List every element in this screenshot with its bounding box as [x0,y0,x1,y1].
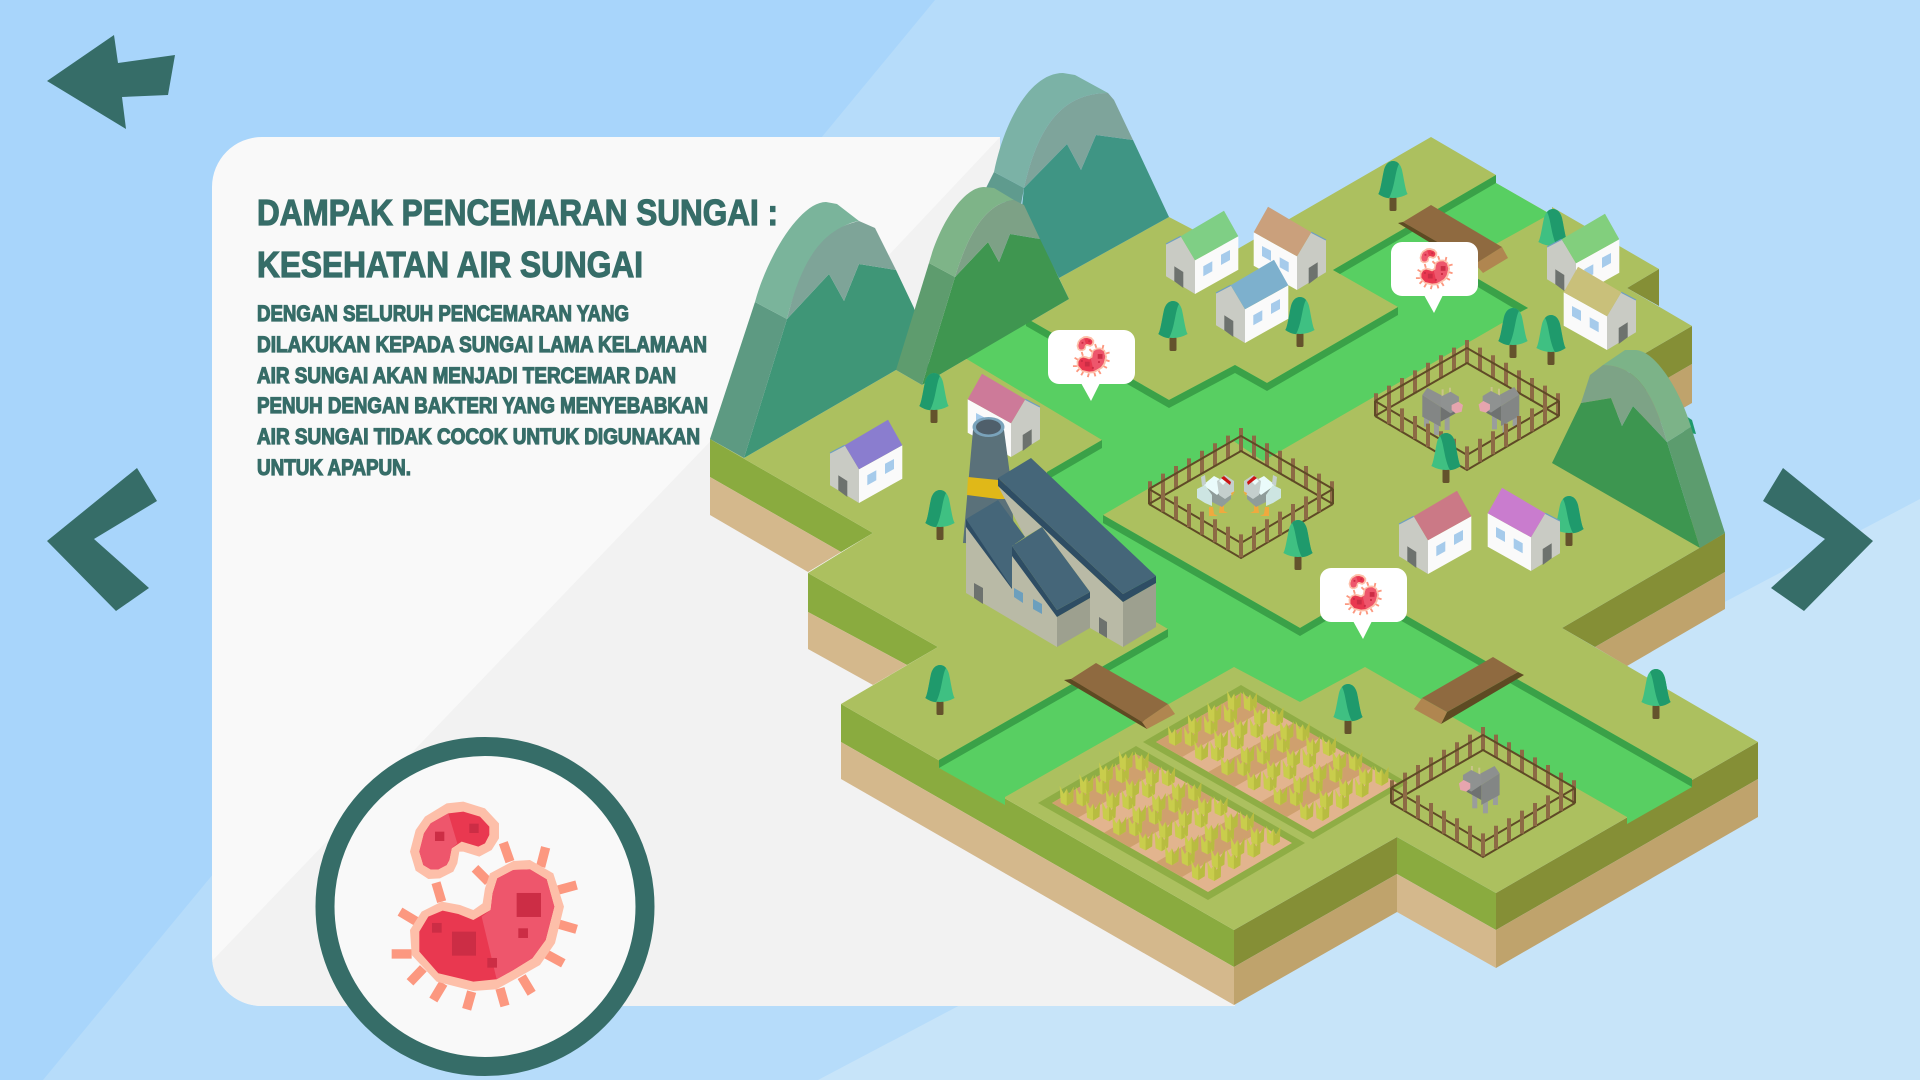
factory [966,458,1156,647]
fence: chicken pen front [1149,489,1333,558]
text block: description: DENGAN SELURUH PENCEMARAN YANG [257,301,629,326]
fence: single cow pen front [1391,788,1575,857]
arrow: back [47,35,175,129]
callout: bacteria bottom [1320,568,1407,639]
arrow: next [1763,468,1873,611]
heading: DAMPAK PENCEMARAN SUNGAI : [257,192,778,233]
chicken: left [1197,475,1235,516]
factory chimney [963,417,1015,545]
bridge: lower left [1064,663,1175,729]
mountain: centre green [896,187,1069,385]
text block: description: DILAKUKAN KEPADA SUNGAI LAMA KELAMAAN [257,332,707,357]
cow: right [1479,387,1519,434]
isometric land: top surface [710,137,1758,930]
fence: cow pen front [1375,401,1559,470]
heading: KESEHATAN AIR SUNGAI [257,244,643,285]
callout: bacteria top [1391,242,1478,313]
cow: left [1422,388,1463,435]
cow: single [1459,766,1500,813]
mountain: left [710,202,930,458]
trees and houses: upper [1158,161,1636,365]
bridge: top [1398,205,1508,273]
arrow: previous [47,468,157,611]
text block: description [257,301,708,480]
isometric land: soil and grass sides [710,269,1758,1005]
mountain: right [1552,350,1725,548]
fence: single cow pen back [1391,727,1575,803]
bridge: lower right [1414,657,1524,724]
tree: hidden behind right mountain [1684,416,1696,434]
text block: description: AIR SUNGAI TIDAK COCOK UNTUK DIGUNAKAN [257,424,700,449]
text block: description: UNTUK APAPUN. [257,455,411,480]
heading [257,192,778,285]
icon: bacteria in circle [325,746,645,1066]
fence: chicken pen back [1149,428,1333,504]
fence: cow pen back [1375,340,1559,416]
chicken: right [1243,475,1281,516]
trees and houses: middle and lower [830,373,1671,734]
rice field: lower [1038,746,1305,900]
panel: text card [212,137,1242,1007]
rice field: upper [1143,685,1408,839]
river [939,175,1692,824]
text block: description: PENUH DENGAN BAKTERI YANG MENYEBABKAN [257,393,708,418]
mountain: teal back [985,73,1169,278]
callout: bacteria left [1048,330,1135,401]
text block: description: AIR SUNGAI AKAN MENJADI TERCEMAR DAN [257,363,676,388]
